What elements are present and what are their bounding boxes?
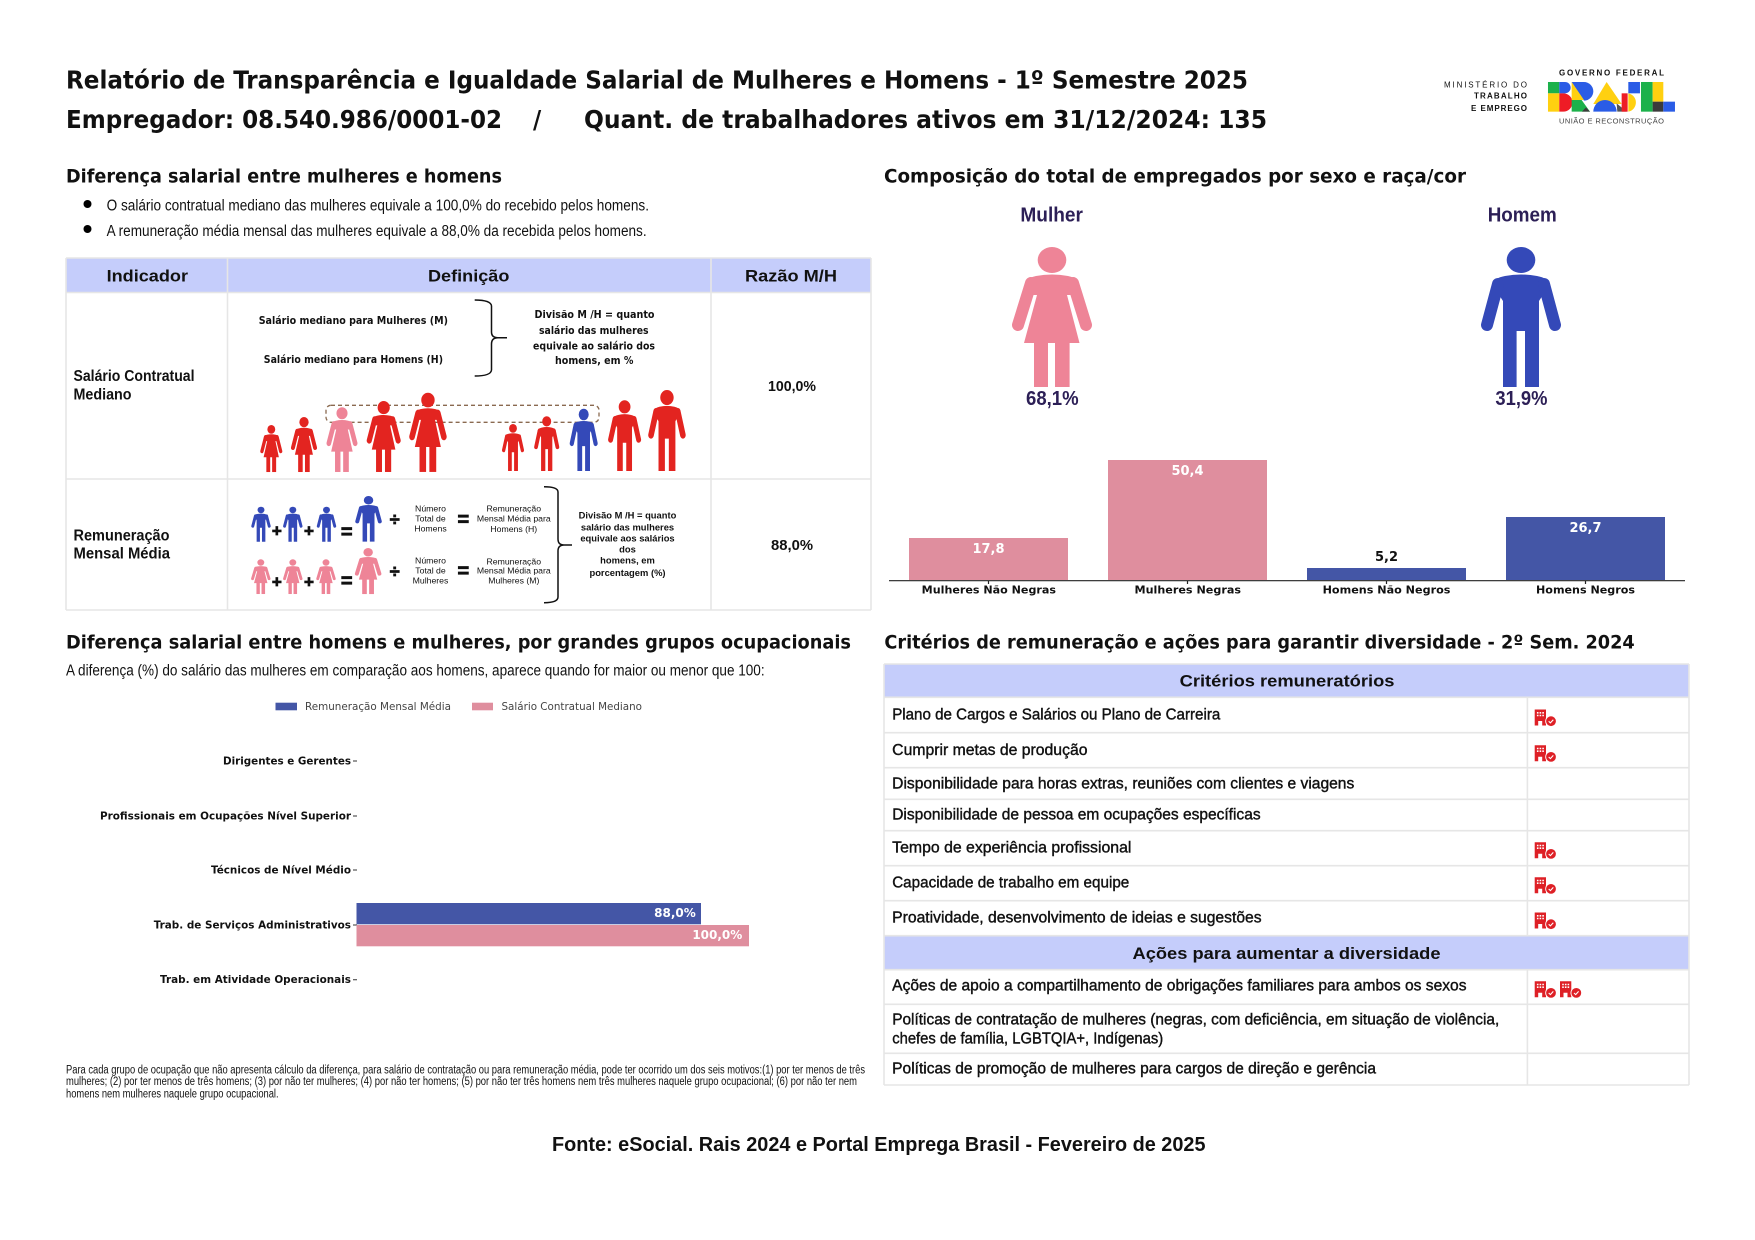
bar chart: composição por raça/cor: 17,8 xyxy=(972,542,1005,557)
definition: salário mediano: Salário mediano para Mulheres (M) xyxy=(259,314,448,327)
panel: homem: Homem xyxy=(1488,205,1557,227)
rows: ações: chefes de família, LGBTQIA+, Indígenas) xyxy=(892,1030,1163,1047)
bar chart: composição por raça/cor: 5,2 xyxy=(1375,550,1398,565)
definition: mulheres: Mensal Média para xyxy=(477,565,551,575)
panel: mulher xyxy=(1018,205,1086,410)
bar chart: grupos ocupacionais xyxy=(100,754,749,986)
rows: critérios xyxy=(892,706,1355,926)
value: razão mediana: 100,0% xyxy=(768,378,816,395)
heading: composição: Composição do total de empregados por sexo e raça/cor xyxy=(884,165,1467,187)
definition: homens: Mensal Média para xyxy=(477,513,551,523)
footnote: mulheres; (2) por ter menos de três homens; (3) por não ter mulheres; (4) por não ter homens; (5) por não ter três homens nem três mulheres naquele grupo ocupacional; (6) por não ter nem xyxy=(66,1076,857,1088)
bar chart: composição por raça/cor xyxy=(889,460,1685,596)
bar chart: grupos ocupacionais: 100,0% xyxy=(692,928,742,942)
definition: divisão M/H: homens, em xyxy=(600,555,655,566)
definition: mulheres: Mulheres xyxy=(413,575,449,585)
bar chart: composição por raça/cor: Homens Não Negros xyxy=(1323,583,1451,596)
heading: critérios: Critérios de remuneração e ações para garantir diversidade - 2º Sem. 2024 xyxy=(884,632,1635,654)
definition: homens: = xyxy=(457,509,469,531)
panel: mulher: 68,1% xyxy=(1026,388,1079,410)
text: explicação: A diferença (%) do salário das mulheres em comparação aos homens, aparece quando for maior ou menor que 100: xyxy=(66,663,765,680)
definition: mulheres: Total de xyxy=(415,565,446,575)
definition: divisão M/H: equivale aos salários xyxy=(580,533,675,544)
legend: Remuneração Mensal Média xyxy=(305,701,451,713)
footer source: Fonte: eSocial. Rais 2024 e Portal Emprega Brasil - Fevereiro de 2025 xyxy=(552,1134,1206,1156)
title: / xyxy=(533,105,542,134)
definition: mulheres xyxy=(253,548,551,594)
definition: divisão M/H: dos xyxy=(619,544,636,555)
table header: Razão M/H xyxy=(745,267,837,286)
icons: mulheres e homens ordenados xyxy=(262,390,683,472)
logo: ministério e governo federal: MINISTÉRIO DO xyxy=(1444,80,1527,89)
legend: Salário Contratual Mediano xyxy=(502,701,642,713)
title: Quant. de trabalhadores ativos em 31/12/2024: 135 xyxy=(584,105,1267,134)
definition: homens xyxy=(253,496,551,544)
definition: mulheres: + xyxy=(272,572,282,592)
icons: ações xyxy=(1535,981,1582,999)
definition: homens: ÷ xyxy=(390,510,400,530)
definition: mulheres: + xyxy=(304,572,314,592)
definition: salário mediano xyxy=(259,300,655,376)
logo: ministério e governo federal: GOVERNO FEDERAL xyxy=(1559,69,1664,78)
definition: salário mediano: Salário mediano para Homens (H) xyxy=(264,353,443,366)
row label: salário contratual mediano xyxy=(74,368,194,404)
definition: homens: + xyxy=(304,522,314,540)
bullet text block: O salário contratual mediano das mulheres equivale a 100,0% do recebido pelos homens. xyxy=(107,198,649,215)
title xyxy=(66,66,1267,134)
row label: salário contratual mediano: Mediano xyxy=(74,386,132,404)
footnote: Para cada grupo de ocupação que não apresenta cálculo da diferença, para salário de contratação ou para remuneração média, pode ter ocorrido um dos seis motivos:(1) por ter menos de três xyxy=(66,1064,865,1076)
value: razão média: 88,0% xyxy=(771,537,813,554)
row label: remuneração mensal média xyxy=(74,528,170,562)
logo: ministério e governo federal: E EMPREGO xyxy=(1471,104,1527,113)
footnote xyxy=(66,1064,865,1101)
bullet text block: A remuneração média mensal das mulheres equivale a 88,0% da recebida pelos homens. xyxy=(107,223,647,240)
rows: critérios: Disponibilidade de pessoa em ocupações específicas xyxy=(892,806,1261,823)
logo: ministério e governo federal: TRABALHO xyxy=(1474,92,1527,101)
panel: tabela indicadores xyxy=(66,258,871,610)
legend xyxy=(276,701,642,713)
bar chart: grupos ocupacionais: Profissionais em Ocupações Nível Superior xyxy=(100,809,352,822)
definition: salário mediano: salário das mulheres xyxy=(539,324,649,337)
definition: mulheres: = xyxy=(457,561,469,583)
definition: salário mediano: homens, em % xyxy=(555,354,633,367)
definition: homens: Remuneração xyxy=(487,504,541,514)
definition: salário mediano: Divisão M /H = quanto xyxy=(534,308,655,321)
heading: diferença salarial: Diferença salarial entre mulheres e homens xyxy=(66,166,502,188)
title: Relatório de Transparência e Igualdade Salarial de Mulheres e Homens - 1º Semestre 2025 xyxy=(66,66,1248,94)
definition: salário mediano: equivale ao salário dos xyxy=(533,339,655,352)
definition: mulheres: Mulheres (M) xyxy=(488,575,539,585)
table header xyxy=(107,267,837,286)
rows: critérios: Plano de Cargos e Salários ou Plano de Carreira xyxy=(892,706,1221,723)
rows: critérios: Tempo de experiência profissional xyxy=(892,839,1131,856)
bar chart: grupos ocupacionais: 88,0% xyxy=(654,906,696,920)
definition: divisão M/H: Divisão M /H = quanto xyxy=(579,510,677,521)
definition: mulheres: ÷ xyxy=(390,562,400,582)
definition: divisão M/H xyxy=(544,487,677,603)
rows: ações: Políticas de promoção de mulheres para cargos de direção e gerência xyxy=(892,1061,1376,1078)
definition: homens: Número xyxy=(415,504,446,514)
definition: homens: Total de xyxy=(415,513,446,523)
logo: ministério e governo federal: UNIÃO E RECONSTRUÇÃO xyxy=(1559,116,1664,125)
definition: mulheres: = xyxy=(341,571,353,593)
bar chart: composição por raça/cor: Mulheres Não Negras xyxy=(922,583,1056,596)
rows: critérios: Disponibilidade para horas extras, reuniões com clientes e viagens xyxy=(892,775,1355,792)
bar chart: grupos ocupacionais: Dirigentes e Gerentes xyxy=(223,754,351,767)
row label: salário contratual mediano: Salário Contratual xyxy=(74,368,194,385)
logo: ministério e governo federal xyxy=(1444,69,1675,125)
row label: remuneração mensal média: Mensal Média xyxy=(74,545,170,562)
rows: ações: Políticas de contratação de mulheres (negras, com deficiência, em situação de violência, xyxy=(892,1011,1499,1028)
panel: mulher: Mulher xyxy=(1020,205,1083,227)
rows: critérios: Proatividade, desenvolvimento de ideias e sugestões xyxy=(892,909,1262,926)
header: critérios remuneratórios: Critérios remuneratórios xyxy=(1180,672,1394,691)
bar chart: grupos ocupacionais: Trab. em Atividade Operacionais xyxy=(160,973,351,986)
definition: homens: + xyxy=(272,522,282,540)
panel: tabela critérios e ações xyxy=(884,664,1689,1085)
panel: homem: 31,9% xyxy=(1495,388,1548,410)
title: Empregador: 08.540.986/0001-02 xyxy=(66,105,502,134)
bar chart: composição por raça/cor: 50,4 xyxy=(1171,464,1204,479)
bar chart: grupos ocupacionais: Técnicos de Nível Médio xyxy=(211,863,351,876)
definition: homens: = xyxy=(341,522,353,544)
rows: critérios: Capacidade de trabalho em equipe xyxy=(892,874,1129,891)
definition: mulheres: Número xyxy=(415,555,446,565)
row label: remuneração mensal média: Remuneração xyxy=(74,528,170,545)
bar chart: composição por raça/cor: Homens Negros xyxy=(1536,583,1635,596)
panel: homem xyxy=(1487,205,1557,410)
bar chart: composição por raça/cor: Mulheres Negras xyxy=(1134,583,1241,596)
definition: divisão M/H: salário das mulheres xyxy=(581,521,674,532)
definition: mulheres: Remuneração xyxy=(487,556,541,566)
header: ações: Ações para aumentar a diversidade xyxy=(1132,944,1440,963)
rows: critérios: Cumprir metas de produção xyxy=(892,742,1088,759)
definition: homens: Homens (H) xyxy=(490,524,537,534)
definition: divisão M/H: porcentagem (%) xyxy=(589,567,666,578)
bar chart: composição por raça/cor: 26,7 xyxy=(1569,521,1602,536)
icons: faixas de empresa xyxy=(1535,710,1557,930)
bar chart: grupos ocupacionais: Trab. de Serviços Administrativos xyxy=(154,918,351,931)
heading: grandes grupos ocupacionais: Diferença salarial entre homens e mulheres, por grandes grupos ocupacionais xyxy=(66,632,851,654)
definition: homens: Homens xyxy=(414,523,447,533)
table header: Definição xyxy=(428,267,509,286)
rows: ações: Ações de apoio a compartilhamento de obrigações familiares para ambos os sexos xyxy=(892,978,1467,995)
rows: ações xyxy=(892,978,1499,1078)
table header: Indicador xyxy=(107,267,188,286)
footnote: homens nem mulheres naquele grupo ocupacional. xyxy=(66,1089,279,1101)
bullet text block xyxy=(84,198,649,240)
